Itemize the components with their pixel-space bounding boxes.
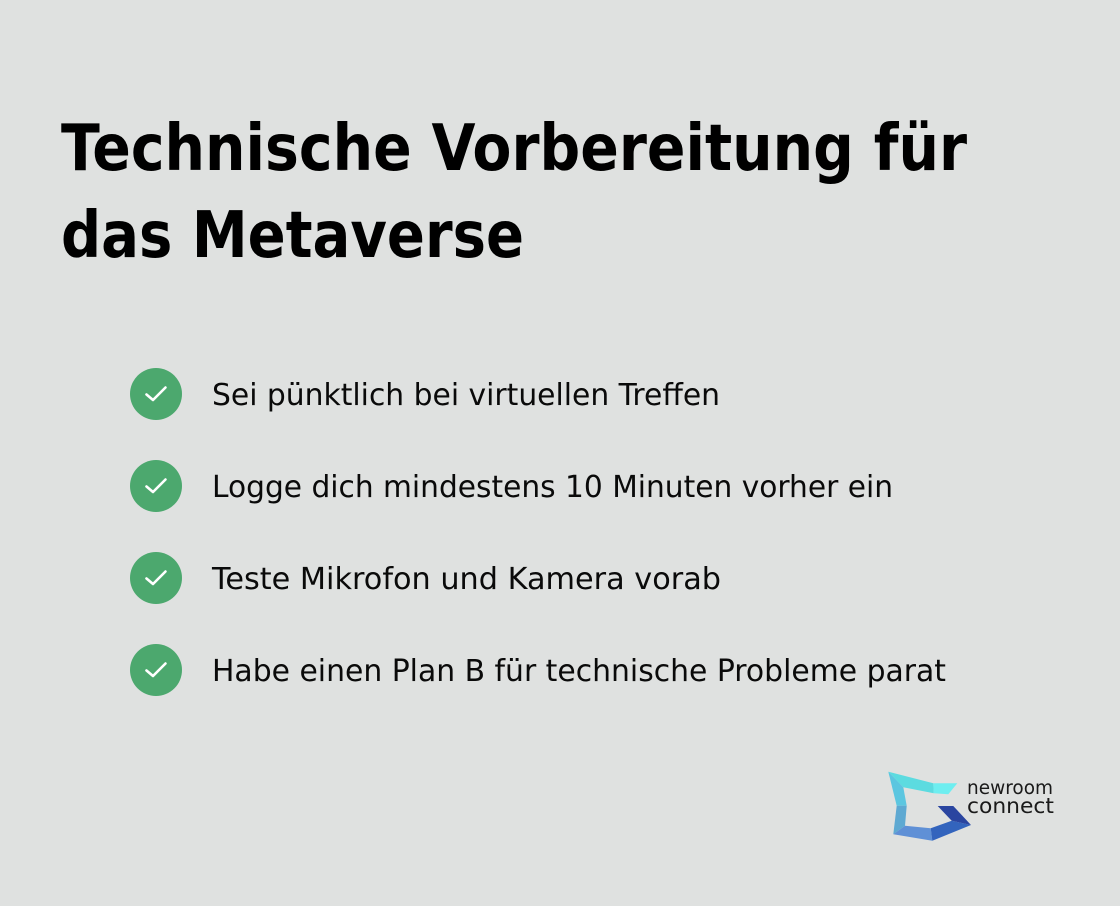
item: pünktlich: Sei pünktlich bei virtuellen Treffen — [212, 378, 720, 413]
icon: logo mark — [888, 772, 971, 841]
item: pünktlich — [130, 368, 720, 420]
wordmark: newroom — [967, 776, 1053, 799]
item: Plan B: Habe einen Plan B für technische Probleme parat — [212, 654, 946, 689]
wordmark — [967, 776, 1054, 819]
item: testen: Teste Mikrofon und Kamera vorab — [211, 562, 721, 597]
item: einloggen: Logge dich mindestens 10 Minuten vorher ein — [212, 470, 893, 505]
item: testen — [130, 552, 721, 604]
item: einloggen — [130, 460, 893, 512]
title: Technische Vorbereitung für — [61, 112, 967, 186]
wordmark: connect — [967, 794, 1054, 819]
checklist — [130, 368, 946, 696]
title: das Metaverse — [61, 199, 524, 273]
item: Plan B — [130, 644, 946, 696]
logo: newroom connect — [888, 772, 1054, 841]
title — [61, 112, 967, 273]
